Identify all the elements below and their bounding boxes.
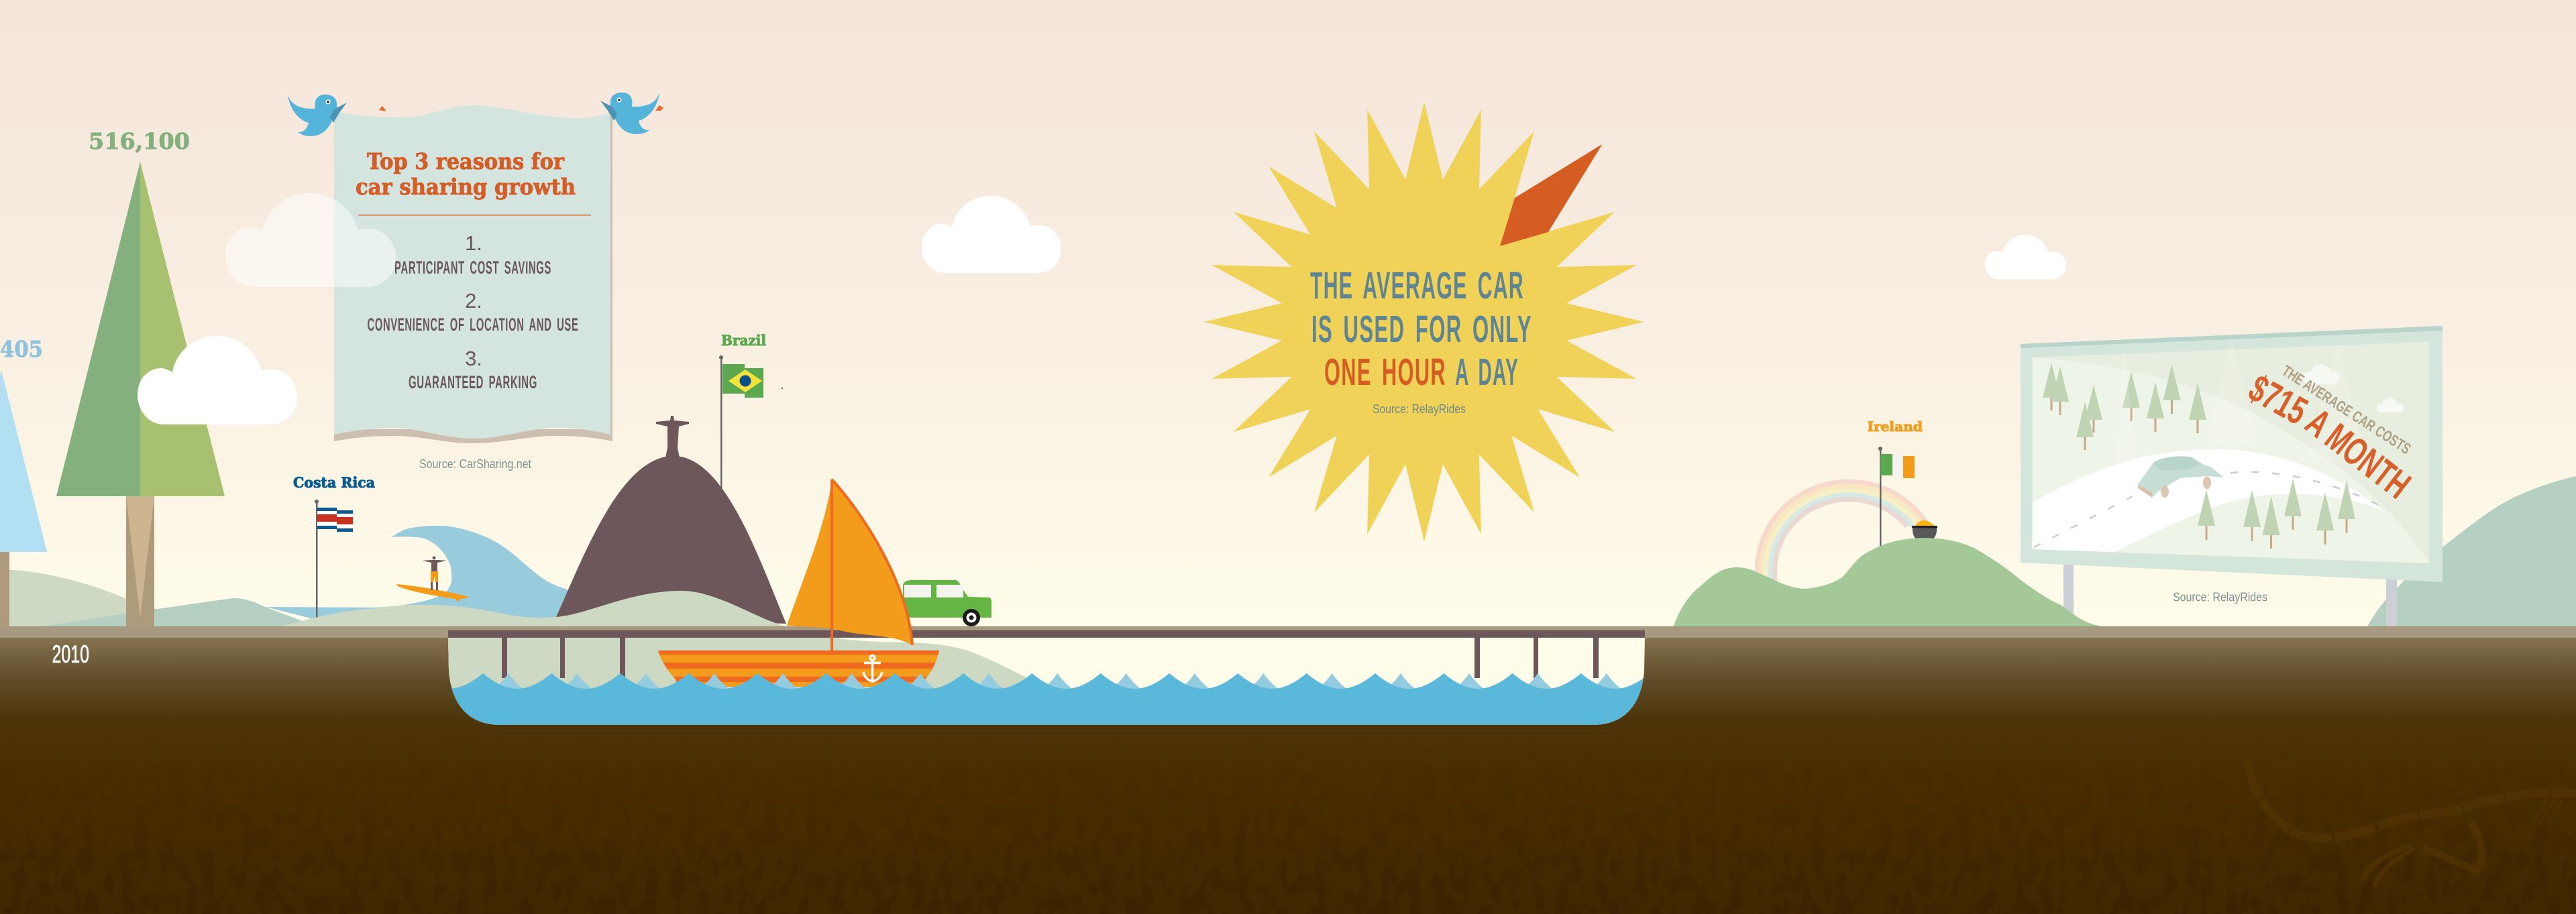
sun star bbox=[1204, 102, 1644, 542]
source: CarSharing: Source: CarSharing.net bbox=[419, 457, 531, 471]
billboard small clouds bbox=[2303, 364, 2404, 412]
billboard light slope bbox=[2033, 357, 2429, 563]
billboard picture background bbox=[2033, 342, 2429, 563]
rainbow bbox=[1758, 481, 1929, 590]
pier deck bbox=[448, 630, 1645, 638]
flag pole bbox=[1880, 448, 1881, 549]
source: RelayRides billboard: Source: RelayRides bbox=[2173, 590, 2267, 604]
fossil dinosaur bbox=[2248, 758, 2576, 887]
ground: soil texture bbox=[0, 738, 2576, 914]
banner heading: Top 3 reasons for bbox=[367, 148, 565, 174]
ground band bbox=[0, 626, 2576, 638]
sun burst callout bbox=[1204, 102, 1644, 542]
wave with surfer bbox=[266, 526, 570, 620]
hill: Ireland green bbox=[1674, 538, 2099, 626]
icon: anchor bbox=[863, 656, 882, 681]
icon: left bluebird bbox=[288, 95, 347, 136]
banner rule bbox=[358, 215, 591, 216]
banner sheet bbox=[334, 105, 610, 439]
car: green bbox=[903, 580, 991, 626]
sun burst callout: A DAY bbox=[1455, 351, 1519, 394]
billboard heading small: THE AVERAGE CAR COSTS bbox=[2279, 361, 2414, 457]
cloud: right bbox=[1985, 235, 2066, 280]
pool: water inlet bbox=[448, 638, 1645, 727]
billboard top strip bbox=[2021, 326, 2443, 348]
tree: green with 516,100 bbox=[56, 128, 225, 626]
billboard heading large bbox=[2242, 367, 2418, 507]
panel: top 3 reasons banner bbox=[334, 105, 612, 443]
hill: far left bbox=[0, 569, 161, 626]
billboard heading large: $715 bbox=[2242, 367, 2314, 433]
orange shard bbox=[1500, 144, 1602, 246]
cloud: white over tree bbox=[138, 336, 297, 424]
cloud: translucent over banner bbox=[225, 193, 396, 287]
reason 3: 3. bbox=[465, 347, 482, 370]
country label: Ireland bbox=[1868, 418, 1923, 435]
billboard car bbox=[2138, 456, 2224, 498]
flag cloth bbox=[1880, 454, 1915, 478]
billboard lower trees bbox=[2198, 479, 2355, 549]
flag: Costa Rica bbox=[293, 474, 375, 618]
tree crown bbox=[56, 162, 140, 496]
number label: 405: 405 bbox=[0, 336, 43, 362]
billboard heading large: A MONTH bbox=[2298, 400, 2418, 507]
flag: Ireland bbox=[1868, 418, 1923, 549]
surfer figure bbox=[422, 557, 447, 590]
small orange bird behind panel bbox=[379, 106, 386, 111]
mountain with Christ statue bbox=[556, 416, 786, 624]
icon: right bluebird bbox=[600, 93, 659, 134]
cloud: center bbox=[922, 196, 1061, 273]
flag pole bbox=[316, 502, 318, 618]
banner shadow bbox=[334, 115, 612, 443]
boat hull bbox=[657, 650, 940, 687]
hill: teal right bbox=[2367, 476, 2576, 626]
year label: 2010 bbox=[52, 640, 89, 668]
sun text line 2: IS USED FOR ONLY bbox=[1311, 308, 1532, 351]
billboard road dashes bbox=[2034, 472, 2381, 547]
small orange bird right bbox=[655, 105, 663, 111]
sailboat sail and mast bbox=[787, 479, 912, 650]
flag pole bbox=[720, 357, 722, 492]
source: RelayRides: Source: RelayRides bbox=[1373, 402, 1466, 416]
shore hill bbox=[448, 638, 1033, 697]
hill: teal left bbox=[43, 598, 317, 626]
reason 1: PARTICIPANT COST SAVINGS bbox=[394, 258, 551, 278]
front waves bbox=[448, 673, 1645, 703]
tree: blue bbox=[0, 370, 47, 626]
tree trunk bbox=[126, 496, 154, 626]
sun text line 1: THE AVERAGE CAR bbox=[1310, 264, 1524, 307]
billboard road bbox=[2033, 449, 2383, 552]
reason 2: CONVENIENCE OF LOCATION AND USE bbox=[368, 315, 578, 335]
flag cloth bbox=[722, 364, 763, 398]
reason 3: GUARANTEED PARKING bbox=[409, 372, 537, 392]
billboard frame bbox=[2021, 326, 2443, 582]
billboard legs bbox=[2063, 563, 2397, 626]
country label: Brazil bbox=[721, 332, 766, 349]
back waves bbox=[448, 673, 1645, 703]
sky background bbox=[0, 0, 2576, 626]
flag: Brazil bbox=[719, 332, 766, 492]
reason 2 bbox=[368, 289, 578, 335]
icon: pot of gold bbox=[1912, 520, 1937, 542]
billboard bbox=[2021, 326, 2443, 582]
banner heading bbox=[356, 148, 576, 200]
billboard light beams bbox=[2113, 335, 2368, 536]
statue bbox=[656, 416, 689, 457]
small speck bbox=[782, 388, 783, 389]
ground: soil bbox=[0, 638, 2576, 914]
sun text line 3: ONE HOUR bbox=[1324, 351, 1446, 394]
reason 1 bbox=[394, 231, 551, 278]
reason 1: 1. bbox=[465, 231, 482, 255]
reason 3 bbox=[409, 347, 537, 392]
banner heading: car sharing growth bbox=[356, 174, 576, 200]
reason 2: 2. bbox=[465, 289, 482, 312]
country label: Costa Rica bbox=[293, 474, 375, 491]
number label: 516,100: 516,100 bbox=[89, 128, 190, 154]
pier posts bbox=[502, 638, 1599, 678]
flag cloth bbox=[317, 508, 353, 532]
billboard upper trees bbox=[2043, 363, 2206, 450]
hill: pale green foreground bbox=[282, 591, 790, 630]
surfboard bbox=[396, 584, 469, 602]
